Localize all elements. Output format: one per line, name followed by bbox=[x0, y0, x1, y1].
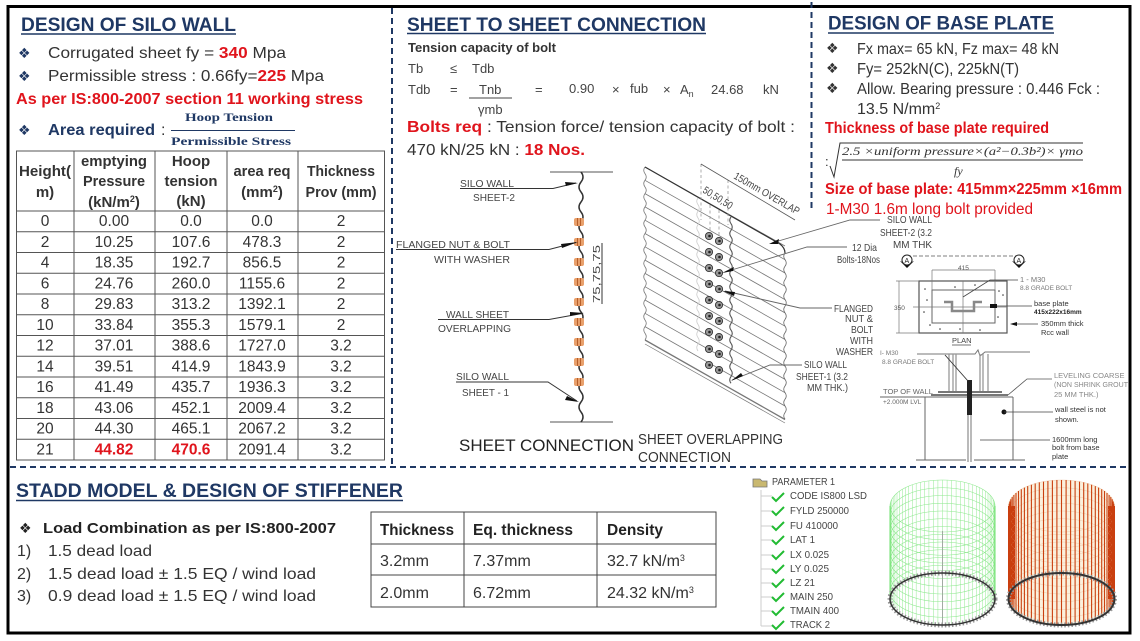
tension capacity formula: Tnb bbox=[479, 82, 501, 97]
parameter tree: PARAMETER 1 bbox=[772, 476, 835, 488]
table: wall thickness: Pressure bbox=[83, 173, 145, 190]
table: wall thickness: 10.25 bbox=[95, 234, 133, 251]
diagram: sheet overlapping: FLANGED bbox=[834, 303, 873, 315]
table: wall thickness: 1579.1 bbox=[238, 317, 286, 334]
table: wall thickness: 313.2 bbox=[172, 296, 210, 313]
table: wall thickness: ) bbox=[278, 184, 283, 201]
base plate forces: ❖ bbox=[826, 41, 839, 57]
table: wall thickness: 1392.1 bbox=[238, 296, 286, 313]
diagram: sheet connection section: SHEET - 1 bbox=[462, 387, 509, 399]
table: equivalent thickness bbox=[371, 512, 716, 607]
model: red cylinder bbox=[1008, 480, 1115, 625]
area required formula: Hoop Tension bbox=[185, 112, 274, 124]
table: wall thickness: 3.2 bbox=[330, 441, 352, 458]
tension capacity formula: × bbox=[663, 82, 671, 97]
diagram: sheet connection section: SILO WALL bbox=[460, 178, 514, 190]
table: wall thickness: 0.0 bbox=[180, 213, 202, 230]
load combination list: 1) bbox=[17, 543, 31, 560]
diagram: base plate section: 1600mm long bbox=[1052, 435, 1097, 444]
table: wall thickness: 2 bbox=[337, 275, 345, 292]
parameter tree: LAT 1 bbox=[790, 534, 815, 546]
tension capacity formula: Tdb bbox=[408, 82, 430, 97]
tension capacity formula: A bbox=[680, 82, 689, 97]
table: wall thickness: 260.0 bbox=[172, 275, 211, 292]
table: wall thickness: Thickness bbox=[307, 163, 375, 180]
parameter tree: LZ 21 bbox=[790, 577, 815, 589]
diagram: sheet overlapping: SHEET-1 (3.2 bbox=[796, 371, 848, 383]
tension capacity formula: Tension capacity of bolt bbox=[408, 41, 557, 55]
area required formula bbox=[18, 112, 295, 148]
diagram: sheet overlapping: MM THK bbox=[893, 239, 932, 251]
base plate forces: ❖ bbox=[826, 61, 839, 77]
table: wall thickness: 2 bbox=[337, 296, 345, 313]
tension capacity formula: ≤ bbox=[450, 61, 457, 76]
table: wall thickness: 37.01 bbox=[95, 338, 133, 354]
table: wall thickness: ) bbox=[135, 194, 140, 211]
table: equivalent thickness: Eq. thickness bbox=[473, 522, 573, 539]
tension capacity formula: kN bbox=[763, 82, 779, 97]
table: wall thickness: emptying bbox=[81, 153, 147, 170]
table: wall thickness: 14 bbox=[36, 358, 54, 375]
diagram: base plate plan: 8.8 GRADE BOLT bbox=[1020, 285, 1072, 292]
caption: sheet overlapping connection: CONNECTION bbox=[638, 450, 731, 466]
diagram: base plate plan: A bbox=[904, 258, 910, 265]
diagram: base plate plan: A bbox=[1016, 258, 1022, 265]
table: wall thickness: 4 bbox=[41, 254, 50, 272]
table: wall thickness: 2 bbox=[41, 234, 49, 251]
tension capacity formula: Tdb bbox=[472, 61, 494, 76]
table: wall thickness: (kN) bbox=[176, 193, 206, 210]
table: wall thickness: 44.82 bbox=[95, 441, 133, 458]
table: wall thickness: 3.2 bbox=[330, 338, 352, 354]
table: equivalent thickness: 3.2mm bbox=[380, 553, 429, 570]
table: wall thickness: 2091.4 bbox=[238, 441, 286, 458]
table: wall thickness: area req bbox=[234, 163, 290, 180]
panel dividers bbox=[10, 2, 1129, 467]
diagram: sheet overlapping: 50,50,50 bbox=[700, 184, 735, 212]
table: wall thickness: Height( bbox=[19, 163, 71, 180]
diagram: sheet overlapping: Bolts-18Nos bbox=[837, 254, 880, 266]
diagram: base plate plan: Rcc wall bbox=[1041, 328, 1069, 337]
table: wall thickness: 12 bbox=[36, 338, 54, 354]
diagram: sheet connection section: WITH WASHER bbox=[434, 254, 510, 266]
table: wall thickness: 41.49 bbox=[95, 379, 133, 396]
diagram: base plate section: LEVELING COARSE bbox=[1054, 371, 1124, 380]
diagram: base plate section: bolt from base bbox=[1052, 443, 1100, 452]
table: wall thickness: 355.3 bbox=[172, 317, 210, 334]
table: wall thickness: 856.5 bbox=[243, 254, 281, 272]
load combination list: 1.5 dead load bbox=[48, 543, 152, 560]
bolts required: 470 kN/25 kN : 18 Nos. bbox=[407, 142, 585, 159]
table: wall thickness: 20 bbox=[36, 420, 54, 438]
diagram: base plate plan bbox=[894, 255, 1084, 345]
table: wall thickness: 2 bbox=[130, 194, 135, 204]
area required formula: ❖ bbox=[18, 123, 31, 139]
table: wall thickness: 192.7 bbox=[172, 254, 210, 272]
tension capacity formula: × bbox=[612, 82, 620, 97]
table: wall thickness: 0 bbox=[41, 213, 50, 230]
diagram: sheet overlapping: SHEET-2 (3.2 bbox=[880, 227, 932, 239]
table: equivalent thickness: 24.32 kN/m bbox=[607, 585, 689, 602]
diagram: base plate section: TOP OF WALL bbox=[883, 387, 933, 396]
diagram: sheet connection section bbox=[396, 172, 613, 422]
table: wall thickness: 388.6 bbox=[172, 338, 210, 354]
table: equivalent thickness: 6.72mm bbox=[473, 585, 531, 602]
bolts required bbox=[407, 119, 795, 159]
caption: sheet overlapping connection bbox=[638, 432, 783, 466]
heading: design of base plate: DESIGN OF BASE PLATE bbox=[828, 12, 1054, 34]
table: wall thickness: Prov (mm) bbox=[306, 184, 376, 201]
caption: sheet overlapping connection: SHEET OVERLAPPING bbox=[638, 432, 783, 448]
panel: design of base plate bbox=[825, 12, 1128, 462]
table: equivalent thickness: 3 bbox=[680, 553, 685, 563]
table: wall thickness: 3.2 bbox=[330, 400, 352, 417]
table: wall thickness: 2 bbox=[337, 317, 345, 334]
diagram: sheet overlapping: MM THK.) bbox=[807, 382, 848, 394]
diagram: base plate plan: 415 bbox=[958, 265, 969, 272]
table: wall thickness: 6 bbox=[41, 275, 49, 292]
thickness formula: fy bbox=[954, 164, 963, 178]
table: wall thickness: 470.6 bbox=[172, 441, 211, 458]
base plate forces: Fx max= 65 kN, Fz max= 48 kN bbox=[857, 41, 1059, 58]
base plate forces: Fy= 252kN(C), 225kN(T) bbox=[857, 61, 1019, 78]
load combination list bbox=[17, 520, 336, 605]
diagram: base plate plan: base plate bbox=[1034, 299, 1069, 308]
caption: sheet connection: SHEET CONNECTION bbox=[459, 436, 634, 455]
thickness formula: 2.5 ×uniform pressure×(a²−0.3b²)× γmo bbox=[842, 146, 1083, 158]
bullet: permissible stress: Permissible stress : 0.66fy= 225 Mpa bbox=[48, 68, 324, 85]
model: green cylinder bbox=[890, 480, 995, 625]
table: equivalent thickness: 2.0mm bbox=[380, 585, 429, 602]
table: wall thickness: 18.35 bbox=[95, 254, 133, 272]
load combination list: Load Combination as per IS:800-2007 bbox=[43, 520, 336, 537]
parameter tree: CODE IS800 LSD bbox=[790, 490, 867, 502]
table: wall thickness: 2 bbox=[273, 184, 278, 194]
parameter tree: LY 0.025 bbox=[790, 563, 829, 575]
heading: sheet to sheet connection: SHEET TO SHEET CONNECTION bbox=[407, 14, 706, 36]
base plate forces: ❖ bbox=[826, 81, 839, 97]
table: equivalent thickness: 3 bbox=[689, 585, 694, 595]
table: wall thickness: (mm bbox=[241, 184, 273, 201]
diagram: base plate section: shown. bbox=[1055, 415, 1079, 424]
diagram: base plate section: +2.000M LVL bbox=[883, 399, 922, 406]
load combination list: 2) bbox=[17, 566, 31, 583]
table: wall thickness: 2 bbox=[337, 213, 345, 230]
diagram: sheet overlapping: WASHER bbox=[836, 346, 873, 358]
table: wall thickness: 3.2 bbox=[330, 358, 352, 375]
diagram: sheet connection section: SILO WALL bbox=[456, 371, 509, 383]
diagram: base plate section: 25 MM THK.) bbox=[1054, 390, 1099, 399]
parameter tree: FYLD 250000 bbox=[790, 505, 849, 517]
table: wall thickness: 8 bbox=[41, 296, 49, 313]
diagram: base plate plan: 350 bbox=[894, 305, 905, 312]
table: equivalent thickness: Thickness bbox=[380, 522, 454, 539]
tension capacity formula: γmb bbox=[478, 102, 503, 117]
bullet: corrugated sheet: ❖ bbox=[18, 46, 31, 62]
table: wall thickness: 414.9 bbox=[172, 358, 210, 375]
table: wall thickness: tension bbox=[164, 173, 218, 190]
table: wall thickness: 1843.9 bbox=[238, 358, 286, 375]
bolts required: Bolts req : Tension force/ tension capacity of bolt : bbox=[407, 119, 795, 136]
tension capacity formula: fub bbox=[630, 81, 648, 96]
panel: design of silo wall bbox=[16, 14, 384, 460]
thickness formula bbox=[825, 143, 1083, 178]
table: wall thickness: 3.2 bbox=[330, 379, 352, 396]
parameter tree bbox=[753, 476, 867, 631]
table: wall thickness: 465.1 bbox=[172, 420, 210, 438]
diagram: sheet overlapping: SILO WALL bbox=[887, 214, 932, 226]
table: wall thickness: 1727.0 bbox=[238, 338, 286, 354]
table: wall thickness: 39.51 bbox=[95, 358, 133, 375]
diagram: base plate section: wall steel is not bbox=[1054, 405, 1107, 414]
load combination list: 0.9 dead load ± 1.5 EQ / wind load bbox=[48, 588, 316, 605]
diagram: base plate plan: 350mm thick bbox=[1041, 319, 1084, 328]
table: wall thickness: 478.3 bbox=[243, 234, 281, 251]
table: wall thickness: 43.06 bbox=[95, 400, 133, 417]
table: wall thickness: 10 bbox=[36, 317, 54, 334]
table: wall thickness: 2067.2 bbox=[238, 420, 286, 438]
load combination list: 3) bbox=[17, 588, 31, 605]
table: wall thickness: 16 bbox=[36, 379, 54, 396]
diagram: sheet connection section: FLANGED NUT & BOLT bbox=[396, 239, 511, 251]
parameter tree: TMAIN 400 bbox=[790, 605, 839, 617]
table: wall thickness: 29.83 bbox=[95, 296, 133, 313]
thickness formula: : bbox=[825, 154, 829, 169]
table: wall thickness: 2 bbox=[337, 234, 345, 251]
table: wall thickness: 33.84 bbox=[95, 317, 134, 334]
diagram: base plate plan: PLAN bbox=[952, 336, 972, 345]
table: equivalent thickness: 7.37mm bbox=[473, 553, 531, 570]
parameter tree: FU 410000 bbox=[790, 520, 838, 532]
code reference: As per IS:800-2007 section 11 working stress bbox=[16, 91, 363, 108]
area required formula: Permissible Stress bbox=[171, 136, 292, 148]
table: wall thickness: 3.2 bbox=[330, 420, 352, 438]
table: wall thickness: 0.0 bbox=[251, 213, 273, 230]
diagram: base plate section bbox=[880, 350, 1128, 462]
area required formula: : bbox=[161, 122, 165, 139]
table: wall thickness: m) bbox=[36, 184, 54, 201]
bullet: corrugated sheet: Corrugated sheet fy = 340 Mpa bbox=[48, 45, 286, 62]
tension capacity formula: 0.90 bbox=[569, 81, 594, 96]
diagram: sheet overlapping: 12 Dia bbox=[852, 242, 877, 254]
diagram: base plate section: plate bbox=[1052, 452, 1068, 461]
table: wall thickness: (kN/m bbox=[88, 194, 130, 211]
load combination list: 1.5 dead load ± 1.5 EQ / wind load bbox=[48, 566, 316, 583]
diagram: base plate section: 8.8 GRADE BOLT bbox=[882, 359, 934, 366]
base plate forces bbox=[826, 41, 1100, 118]
table: wall thickness bbox=[16, 151, 384, 460]
tension capacity formula: 24.68 bbox=[711, 82, 744, 97]
table: equivalent thickness: 32.7 kN/m bbox=[607, 553, 680, 570]
tension capacity formula bbox=[408, 41, 779, 117]
table: wall thickness: 107.6 bbox=[172, 234, 210, 251]
diagram: sheet overlapping: NUT & bbox=[845, 313, 873, 325]
tension capacity formula: = bbox=[450, 82, 458, 97]
table: wall thickness: 44.30 bbox=[95, 420, 134, 438]
panel: stadd model and stiffener bbox=[16, 476, 1115, 631]
table: wall thickness: 2 bbox=[337, 254, 345, 272]
heading: design of silo wall: DESIGN OF SILO WALL bbox=[21, 14, 236, 36]
bullet: permissible stress: ❖ bbox=[18, 69, 31, 85]
parameter tree: TRACK 2 bbox=[790, 619, 830, 631]
table: wall thickness: 24.76 bbox=[95, 275, 133, 292]
thickness heading: Thickness of base plate required bbox=[825, 120, 1049, 137]
table: wall thickness: 18 bbox=[36, 400, 54, 417]
base plate size: Size of base plate: 415mm×225mm ×16mm bbox=[825, 181, 1122, 198]
area required formula: Area required bbox=[48, 122, 155, 139]
parameter tree: MAIN 250 bbox=[790, 591, 833, 603]
diagram: sheet connection section: SHEET-2 bbox=[473, 192, 515, 204]
diagram: sheet overlapping: BOLT bbox=[851, 324, 873, 336]
tension capacity formula: Tb bbox=[408, 61, 423, 76]
tension capacity formula: = bbox=[535, 82, 543, 97]
table: wall thickness: 435.7 bbox=[172, 379, 210, 396]
diagram: sheet connection section: 75,75,75 bbox=[591, 245, 603, 303]
table: wall thickness: 21 bbox=[36, 441, 54, 458]
diagram: sheet overlapping: SILO WALL bbox=[804, 359, 847, 371]
diagram: sheet connection section: WALL SHEET bbox=[446, 309, 510, 321]
table: equivalent thickness: Density bbox=[607, 522, 663, 539]
base plate forces: 2 bbox=[935, 101, 940, 111]
table: wall thickness: 0.00 bbox=[99, 213, 129, 230]
table: wall thickness: Hoop bbox=[172, 153, 210, 170]
diagram: sheet overlapping: WITH bbox=[850, 335, 873, 347]
table: wall thickness: 1936.3 bbox=[238, 379, 286, 396]
bolt provided: 1-M30 1.6m long bolt provided bbox=[826, 201, 1033, 218]
base plate forces: 13.5 N/mm bbox=[857, 101, 935, 118]
table: wall thickness: 2009.4 bbox=[238, 400, 286, 417]
heading: stadd model: STADD MODEL & DESIGN OF STIFFENER bbox=[16, 480, 403, 502]
table: wall thickness: 1155.6 bbox=[239, 275, 285, 292]
load combination list: ❖ bbox=[19, 521, 32, 537]
tension capacity formula: n bbox=[689, 89, 694, 99]
diagram: base plate section: (NON SHRINK GROUT bbox=[1054, 380, 1128, 389]
table: wall thickness: 452.1 bbox=[172, 400, 210, 417]
diagram: sheet overlapping bbox=[644, 164, 932, 423]
panel: sheet to sheet connection bbox=[396, 14, 932, 466]
diagram: sheet overlapping: 150mm OVERLAP bbox=[732, 170, 802, 218]
diagram: sheet connection section: OVERLAPPING bbox=[438, 323, 511, 335]
diagram: base plate plan: 1 - M30 bbox=[1020, 275, 1045, 284]
diagram: base plate section: I- M30 bbox=[880, 350, 899, 357]
parameter tree: LX 0.025 bbox=[790, 549, 829, 561]
diagram: base plate plan: 415x222x16mm bbox=[1034, 309, 1082, 316]
base plate forces: Allow. Bearing pressure : 0.446 Fck : bbox=[857, 81, 1100, 98]
